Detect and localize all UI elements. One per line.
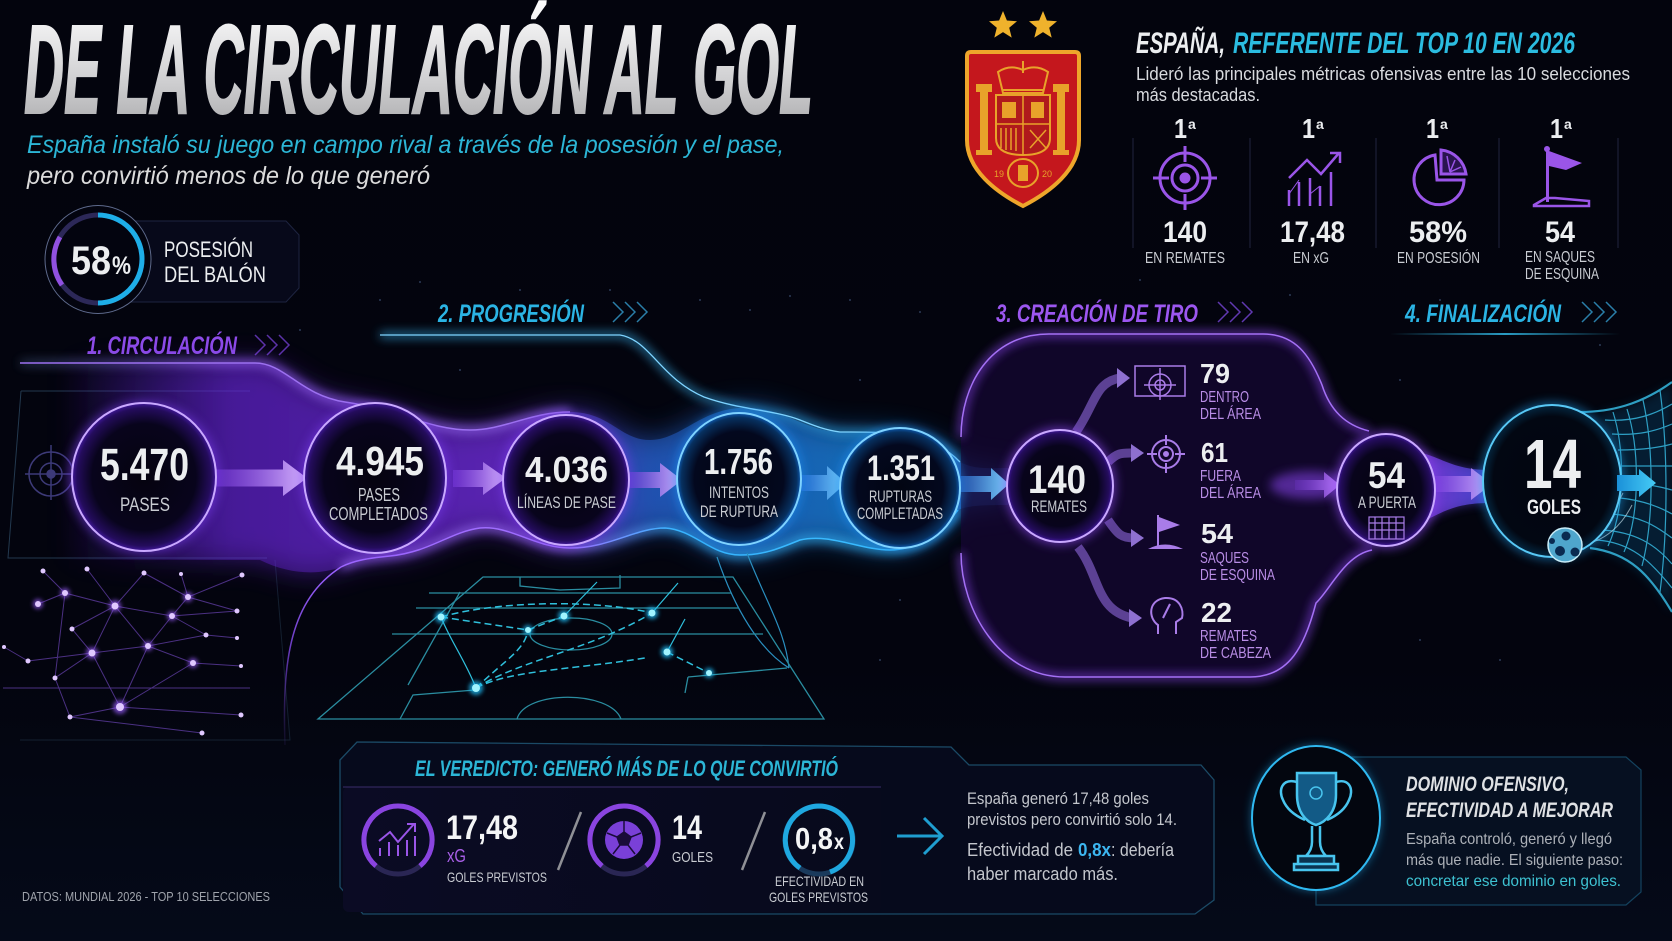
node: lineas de pase: LÍNEAS DE PASE xyxy=(517,493,616,512)
passing network xyxy=(2,566,250,736)
arrow 6 xyxy=(1295,472,1340,498)
subtitle xyxy=(26,131,784,190)
crest: Spain: 20 xyxy=(1042,169,1052,179)
panel: verdict xyxy=(340,742,1214,914)
icon: corner flag xyxy=(1534,146,1589,206)
left field frame xyxy=(8,391,290,740)
branch 22: DE CABEZA xyxy=(1200,645,1271,662)
node: pases xyxy=(68,401,220,553)
metric: saques: EN SAQUES xyxy=(1525,249,1595,266)
node: intentos de ruptura: INTENTOS xyxy=(709,483,769,502)
description xyxy=(1136,64,1630,105)
metric: saques: DE ESQUINA xyxy=(1525,266,1599,283)
metric: saques: 54 xyxy=(1545,216,1575,249)
branch 61 xyxy=(1200,437,1261,502)
node: intentos de ruptura xyxy=(674,410,804,548)
tactical pitch xyxy=(318,575,824,719)
metric: xG: 1 xyxy=(1302,113,1315,144)
metric: xG: EN xG xyxy=(1293,250,1329,267)
metric: xG: a xyxy=(1316,116,1324,132)
metric: remates xyxy=(1145,113,1225,267)
stat: xG: xG xyxy=(447,846,466,866)
node: remates: 140 xyxy=(1028,458,1086,502)
metric: xG: 17,48 xyxy=(1280,216,1345,249)
node: remates xyxy=(1004,427,1116,545)
verdict text: 0,8x xyxy=(1078,840,1111,860)
node: goles: GOLES xyxy=(1527,496,1581,519)
verdict text xyxy=(967,789,1177,884)
metric: saques: a xyxy=(1564,116,1572,132)
arrow 4 xyxy=(800,466,846,500)
branch 61: 61 xyxy=(1201,437,1228,468)
branch 61: FUERA xyxy=(1200,468,1241,485)
node: pases completados xyxy=(300,403,450,553)
node: pases: PASES xyxy=(120,495,170,516)
flow ribbon: circulation to shots xyxy=(20,335,1010,745)
arrow 1 xyxy=(216,460,307,496)
converging glow xyxy=(1270,471,1350,499)
goal net xyxy=(1580,382,1672,612)
metric: saques xyxy=(1525,113,1599,283)
node: goles: 14 xyxy=(1524,425,1581,503)
branch 54: DE ESQUINA xyxy=(1200,567,1275,584)
description: Lideró las principales métricas ofensivas entre las 10 selecciones xyxy=(1136,64,1630,84)
possession label: DEL BALÓN xyxy=(164,262,266,287)
icon: trophy xyxy=(1281,773,1351,870)
conclusion body: España controló, generó y llegó xyxy=(1406,831,1612,848)
crest: Spain: 19 xyxy=(994,169,1004,179)
heading: referente xyxy=(1136,26,1575,60)
verdict text: España generó 17,48 goles xyxy=(967,789,1149,808)
branch 22: REMATES xyxy=(1200,628,1257,645)
stat: xG xyxy=(364,806,547,885)
possession label xyxy=(164,237,266,287)
section heading 2: 2. PROGRESIÓN xyxy=(437,299,585,328)
arrow: verdict xyxy=(897,818,942,854)
node: a puerta: 54 xyxy=(1368,455,1405,496)
icon: goal xyxy=(1369,517,1404,539)
particles xyxy=(299,279,1601,661)
node: intentos de ruptura: DE RUPTURA xyxy=(700,502,778,521)
verdict text: haber marcado más. xyxy=(967,864,1118,884)
icon: target xyxy=(1153,146,1217,210)
panel: possession xyxy=(45,206,299,314)
arrow 3 xyxy=(629,463,682,497)
conclusion heading: EFECTIVIDAD A MEJORAR xyxy=(1406,799,1614,822)
node: a puerta xyxy=(1334,431,1438,549)
source note: DATOS: MUNDIAL 2026 - TOP 10 SELECCIONES xyxy=(22,889,270,904)
heading: referente: ESPAÑA, xyxy=(1136,26,1225,60)
icon: corner flag xyxy=(1148,515,1183,549)
conclusion heading: DOMINIO OFENSIVO, xyxy=(1406,773,1569,796)
verdict text: previstos pero convirtió solo 14. xyxy=(967,810,1177,829)
arrow 5 xyxy=(956,468,1009,500)
branch 22 xyxy=(1200,597,1271,662)
metric: posesion: EN POSESIÓN xyxy=(1397,248,1480,267)
section heading 4: 4. FINALIZACIÓN xyxy=(1404,299,1562,328)
possession ring xyxy=(45,206,151,314)
conclusion heading xyxy=(1406,773,1614,822)
branch 79: DENTRO xyxy=(1200,389,1249,406)
arrow 8 xyxy=(1617,469,1656,497)
node: goles xyxy=(1480,402,1624,560)
metric: posesion xyxy=(1397,113,1480,267)
arrow 7 xyxy=(1431,468,1492,500)
metric: posesion: a xyxy=(1440,116,1448,132)
node: pases completados: 4.945 xyxy=(336,438,424,484)
icon: chart xyxy=(1289,153,1340,206)
node: lineas de pase xyxy=(500,412,632,548)
conclusion body: concretar ese dominio en goles. xyxy=(1406,873,1621,890)
stat: xG: GOLES PREVISTOS xyxy=(447,869,547,885)
node: rupturas completadas xyxy=(837,426,963,550)
possession value: % xyxy=(112,252,131,280)
possession label: POSESIÓN xyxy=(164,237,253,262)
trophy ring xyxy=(1252,746,1380,890)
icon: football xyxy=(1548,528,1582,562)
branch arrows xyxy=(1076,378,1134,618)
node: rupturas completadas: COMPLETADAS xyxy=(857,504,943,523)
verdict heading: EL VEREDICTO: GENERÓ MÁS DE LO QUE CONVIRTIÓ xyxy=(415,756,838,781)
stat: goles: 14 xyxy=(672,809,702,847)
icon: goal target xyxy=(1135,366,1185,400)
subtitle: pero convirtió menos de lo que generó xyxy=(26,162,430,190)
stars xyxy=(989,11,1057,38)
node: pases completados: COMPLETADOS xyxy=(329,504,428,524)
stat: efectividad: GOLES PREVISTOS xyxy=(769,889,868,905)
icon: pie xyxy=(1414,150,1466,205)
branch 54 xyxy=(1200,518,1275,584)
conclusion body: más que nadie. El siguiente paso: xyxy=(1406,852,1623,869)
branch 79: 79 xyxy=(1200,358,1230,389)
node: lineas de pase: 4.036 xyxy=(525,449,608,490)
flow: shots to goals xyxy=(1415,452,1490,525)
crest: Spain xyxy=(967,11,1079,206)
description: más destacadas. xyxy=(1136,85,1260,105)
stat: efectividad: EFECTIVIDAD EN xyxy=(775,873,864,889)
stat: efectividad xyxy=(769,806,868,905)
panel: shot creation xyxy=(961,334,1372,677)
node: remates: REMATES xyxy=(1031,497,1087,516)
metric: saques: 1 xyxy=(1550,113,1563,144)
branch 61: DEL ÁREA xyxy=(1200,483,1261,502)
section heading 1: 1. CIRCULACIÓN xyxy=(87,331,238,360)
subtitle: España instaló su juego en campo rival a través de la posesión y el pase, xyxy=(27,131,784,159)
stat: goles: GOLES xyxy=(672,849,713,866)
node: rupturas completadas: 1.351 xyxy=(867,449,935,488)
metric: xG xyxy=(1280,113,1345,267)
icon: faint target xyxy=(25,445,76,500)
metric: posesion: 1 xyxy=(1426,113,1439,144)
metric: posesion: 58% xyxy=(1409,216,1467,249)
metric: remates: 140 xyxy=(1163,216,1207,249)
arrow 2 xyxy=(453,462,506,495)
stat: efectividad: x xyxy=(834,831,844,854)
node: pases: 5.470 xyxy=(100,439,189,490)
conclusion body xyxy=(1406,831,1623,890)
panel: conclusion xyxy=(1252,746,1641,905)
stat: efectividad: 0,8 xyxy=(795,821,833,856)
node: a puerta: A PUERTA xyxy=(1358,493,1416,512)
metric: remates: EN REMATES xyxy=(1145,250,1225,267)
possession value: 58 xyxy=(71,239,111,283)
icon: target xyxy=(1147,435,1185,473)
branch 79 xyxy=(1200,358,1261,423)
verdict text: Efectividad de xyxy=(967,840,1073,860)
branch 54: 54 xyxy=(1201,518,1233,549)
section heading 3: 3. CREACIÓN DE TIRO xyxy=(996,299,1198,328)
branch 22: 22 xyxy=(1201,597,1232,628)
node: rupturas completadas: RUPTURAS xyxy=(869,487,932,506)
node: intentos de ruptura: 1.756 xyxy=(704,441,773,482)
branch 54: SAQUES xyxy=(1200,550,1249,567)
branch 79: DEL ÁREA xyxy=(1200,404,1261,423)
stat: goles xyxy=(590,806,713,874)
verdict text: : debería xyxy=(1111,840,1175,860)
stat: xG: 17,48 xyxy=(446,809,518,847)
metric: remates: a xyxy=(1188,116,1196,132)
node: pases completados: PASES xyxy=(358,485,400,505)
icon: head xyxy=(1151,598,1182,634)
metric: remates: 1 xyxy=(1174,113,1187,144)
